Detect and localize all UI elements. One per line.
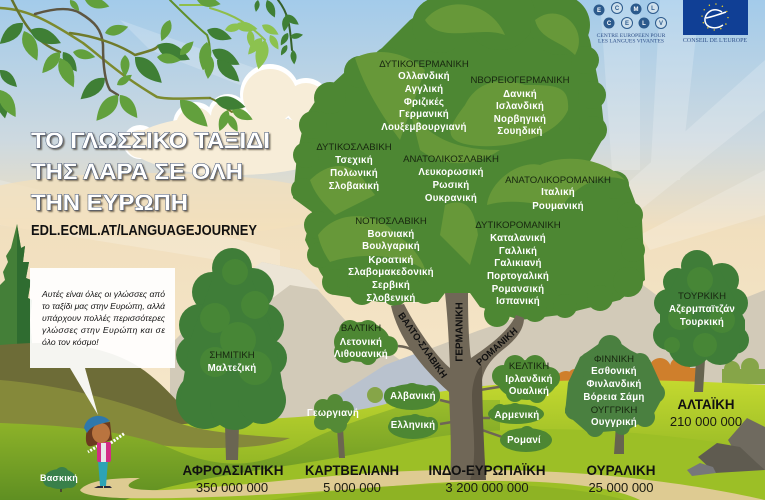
West Germanic: Ολλανδική [398,71,450,82]
crown [176,248,287,430]
family: Altaic: 210 000 000 [670,414,742,429]
trunk [694,360,705,392]
family: Afroasiatic: ΑΦΡΟΑΣΙΑΤΙΚΗ [182,462,284,478]
family: Altaic: ΑΛΤΑΪΚΗ [678,396,734,412]
face [92,423,110,443]
South Slavic: Σλαβομακεδονική [348,267,434,278]
logo text: LES LANGUES VIVANTES [598,38,664,44]
family: Uralic: ΟΥΡΑΛΙΚΗ [586,462,656,478]
bubble text: υπάρχουν πολλές περισσότερες [42,313,166,323]
West Germanic: Γερμανική [399,109,449,120]
logo text [597,33,666,44]
West Romance [475,220,561,307]
labels [208,350,256,374]
West Germanic [379,59,469,133]
trunk [337,428,345,458]
mountains [170,262,765,420]
bubble shape [30,268,175,415]
tree: Semitic [176,248,287,460]
West Romance: Ρομανσική [492,284,544,295]
labels: Λιθουανική [334,349,388,360]
circles: L [642,21,646,27]
tree: Turkic [653,250,749,392]
circles: E [625,21,629,27]
trunk [60,484,62,492]
torso [97,442,111,462]
crown [43,467,77,489]
labels: ΦΙΝΝΙΚΗ [594,354,634,365]
family: Altaic [670,396,742,429]
trunk [225,425,239,460]
foliage [500,426,552,452]
labels: ΤΟΥΡΚΙΚΗ [678,291,726,302]
stars [702,4,728,30]
South Slavic [348,216,434,304]
logo: Council of Europe [683,0,748,44]
West Slavic [316,142,392,192]
bubble text: γλώσσες στην Ευρώπη και σε [42,325,165,335]
bubble text [41,289,166,347]
family: Kartvelian: 5 000 000 [323,480,381,495]
labels: Φινλανδική [586,379,642,390]
emblem [705,10,726,28]
South Slavic: Βουλγαρική [362,241,420,252]
West Slavic: Σλοβακική [329,181,379,192]
family: Uralic: 25 000 000 [588,480,654,495]
labels: Ουγγρική [591,417,637,428]
character: Lara [84,416,125,488]
shoes [94,486,112,488]
South Slavic: ΝΟΤΙΟΣΛΑΒΙΚΗ [355,216,427,227]
bubble text: το ταξίδι μας στην Ευρώπη, αλλά [42,301,166,311]
crown highlights [310,4,625,270]
labels: Εσθονική [591,366,637,377]
clouds [0,64,340,237]
West Romance: Καταλανική [490,233,546,244]
West Slavic: Πολωνική [330,168,378,179]
labels: Ιρλανδική [505,374,553,385]
circles: C [607,21,612,27]
circles: E [597,8,601,14]
trunk shadow [470,365,486,480]
tree: Uralic [565,335,665,454]
small side branches [398,346,505,438]
light leaves [224,20,281,71]
South Slavic: Βοσνιακή [368,229,414,240]
branch with leaves [0,0,303,134]
East Slavic [403,154,499,204]
East Slavic: Ρωσική [433,180,469,191]
circles: M [634,7,638,13]
labels: Βόρεια Σάμη [583,392,645,403]
labels [334,323,388,360]
legs [98,460,108,486]
circles [594,2,666,28]
hill: left green [0,400,500,500]
speech bubble [30,268,175,415]
label: Αρμενική [495,410,539,421]
trunk [614,425,624,454]
bush: Romani [500,426,552,452]
labels: Λετονική [340,337,382,348]
hill: foreground lime [125,429,765,500]
North Germanic: Δανική [503,89,537,100]
Romance branch label: ΡΟΜΑΝΙΚΗ [474,326,520,369]
Balto-Slavic branch label: ΒΑΛΤΟ-ΣΛΑΒΙΚΗ [395,311,449,381]
title [31,128,270,215]
West Romance: Γαλικιανή [494,258,542,269]
family: Indo-European: 3 200 000 000 [445,480,529,495]
label: Αλβανική [390,391,436,402]
bush: Albanian [384,383,440,410]
labels: ΚΕΛΤΙΚΗ [509,361,549,372]
rocks [687,418,765,476]
logo: ECML [594,2,666,44]
label: Ελληνική [391,420,435,431]
flag [683,0,748,35]
crown [565,335,665,437]
circles: L [651,6,655,12]
dark leaves [0,0,303,119]
tree: Georgian [307,394,359,458]
East Slavic: Ουκρανική [425,193,477,204]
foreground grass [270,484,625,500]
bush: Greek [388,414,438,439]
East Slavic: Λευκορωσική [418,167,484,178]
West Germanic: ΔΥΤΙΚΟΓΕΡΜΑΝΙΚΗ [379,59,469,70]
crown [291,0,645,327]
bush: Celtic [492,355,560,403]
circles: V [659,21,663,27]
foliage [492,355,560,403]
foliage [384,383,440,410]
crown highlights [664,267,735,357]
West Germanic: Φριζικές [404,97,444,108]
South Slavic: Σλοβενική [366,293,416,304]
dirt path [80,470,765,500]
East Romance: Ιταλική [541,187,575,198]
hill: mid background green [140,380,765,500]
bubble text: Αυτές είναι όλες οι γλώσσες από [41,289,165,299]
foliage [488,403,544,424]
family: Indo-European: ΙΝΔΟ-ΕΥΡΩΠΑΪΚΗ [428,462,546,478]
family: Kartvelian: ΚΑΡΤΒΕΛΙΑΝΗ [305,462,399,478]
medium leaves [0,0,255,134]
North Germanic [470,75,570,137]
circles: C [615,6,620,12]
West Germanic: Λουξεμβουργιανή [381,122,467,133]
labels [669,291,735,328]
West Romance: ΔΥΤΙΚΟΡΟΜΑΝΙΚΗ [475,220,561,231]
family: Uralic [586,462,656,495]
labels [583,354,645,428]
hair [86,422,112,446]
foliage [334,320,398,365]
South Slavic: Κροατική [368,255,414,266]
West Slavic: ΔΥΤΙΚΟΣΛΑΒΙΚΗ [316,142,392,153]
hill: dark olive left [0,343,215,470]
hill: olive band [0,380,290,448]
bubble text: όλο τον κόσμο! [42,337,99,347]
East Romance [505,175,611,212]
East Romance: ΑΝΑΤΟΛΙΚΟΡΟΜΑΝΙΚΗ [505,175,611,186]
title: ΤΟ ΓΛΩΣΣΙΚΟ ΤΑΞΙΔΙ [31,128,270,153]
labels: Ουαλική [509,386,549,397]
family: Indo-European [428,462,546,495]
pine tree [0,224,32,345]
crown [653,250,749,367]
label: Ρομανί [507,435,541,446]
labels: ΣΗΜΙΤΙΚΗ [209,350,255,361]
family: Afroasiatic [182,462,284,495]
labels: ΟΥΓΓΡΙΚΗ [591,405,637,416]
labels: Τουρκική [680,317,724,328]
North Germanic: ΝΒΟΡΕΙΟΓΕΡΜΑΝΙΚΗ [470,75,570,86]
family: Kartvelian [305,462,399,495]
trunk and branches [391,293,524,480]
South Slavic: Σερβική [372,280,410,291]
bush: Baltic [334,320,398,365]
Germanic branch label: ΓΕΡΜΑΝΙΚΗ [454,302,466,362]
crown [314,394,354,433]
West Romance: Πορτογαλική [487,271,549,282]
West Romance: Γαλλική [499,246,537,257]
labels: Μαλτεζική [208,363,256,374]
bush: Armenian [488,403,544,424]
West Romance: Ισπανική [496,296,540,307]
distant bushes [367,358,765,408]
logo text: CENTRE EUROPEEN POUR [597,33,666,39]
labels: Αζερμπαϊτζάν [669,304,735,315]
North Germanic: Νορβηγική [494,114,546,125]
arms [88,433,125,452]
name: CONSEIL DE L'EUROPE [683,38,747,44]
url: EDL.ECML.AT/LANGUAGEJOURNEY [31,223,257,239]
sun rays and sky streaks [0,0,765,270]
North Germanic: Ισλανδική [496,101,544,112]
label: Γεωργιανή [307,408,359,419]
autumn bushes [555,357,700,393]
foliage [388,414,438,439]
East Romance: Ρουμανική [532,201,584,212]
large Indo-European tree [291,0,645,480]
cap [84,416,110,433]
label: Βασκική [40,473,78,483]
family: Afroasiatic: 350 000 000 [196,480,268,495]
crown highlights [200,259,272,385]
labels [505,361,553,397]
title: ΤΗΣ ΛΑΡΑ ΣΕ ΟΛΗ [31,159,243,184]
West Germanic: Αγγλική [405,84,443,95]
title: ΤΗΝ ΕΥΡΩΠΗ [31,190,188,215]
North Germanic: Σουηδική [497,126,543,137]
West Slavic: Τσεχική [335,155,373,166]
branches [0,0,292,112]
East Slavic: ΑΝΑΤΟΛΙΚΟΣΛΑΒΙΚΗ [403,154,499,165]
tree: Basque [40,467,78,492]
labels: ΒΑΛΤΙΚΗ [341,323,381,334]
